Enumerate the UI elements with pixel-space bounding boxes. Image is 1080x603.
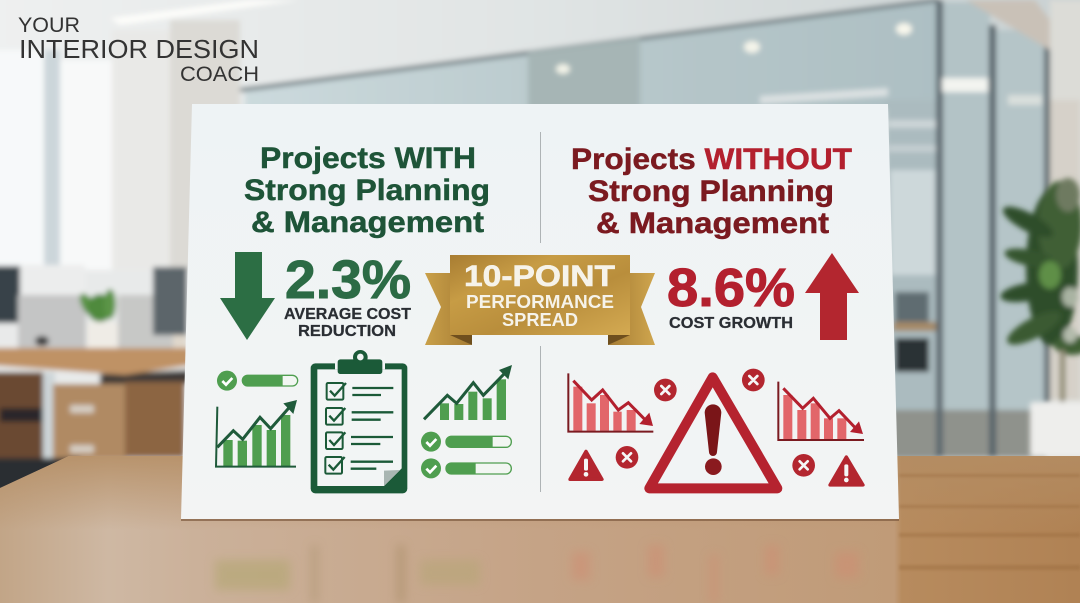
icon: x marks	[616, 369, 815, 477]
gold ribbon: 10-point performance spread	[425, 255, 655, 345]
wooden table	[0, 456, 1080, 603]
stat: 8.6% cost growth: 8.6%	[667, 258, 795, 318]
logo	[18, 14, 259, 86]
plant on the right	[999, 178, 1080, 457]
heading: projects without strong planning: Projects WITHOUT	[571, 143, 852, 176]
icon: green down arrow	[220, 252, 275, 340]
heading: projects with strong planning: Projects WITH	[260, 142, 476, 175]
icon: clipboard checklist	[311, 350, 407, 493]
green icon group	[216, 350, 512, 493]
chart: rising bars right	[424, 365, 512, 420]
icon: checks with progress bars	[421, 432, 511, 478]
icon: small warning triangles	[570, 451, 863, 485]
heading: projects without strong planning	[571, 143, 852, 240]
chart: falling bars right	[778, 382, 864, 440]
heading: projects with strong planning	[244, 142, 490, 239]
icon: large warning triangle	[649, 377, 777, 488]
heading: projects with strong planning: Strong Planning	[244, 174, 490, 207]
stat: 2.3% average cost reduction	[284, 250, 412, 340]
heading: projects without strong planning: Strong Planning	[588, 175, 834, 208]
gold ribbon: 10-point performance spread: PERFORMANCE	[466, 292, 614, 312]
gold ribbon: 10-point performance spread: SPREAD	[502, 310, 578, 330]
heading: projects with strong planning: & Management	[251, 206, 484, 239]
icon: check with progress bar	[217, 371, 298, 391]
red icon group	[568, 369, 864, 488]
stat: 2.3% average cost reduction: REDUCTION	[298, 323, 396, 340]
heading: projects without strong planning: & Management	[596, 207, 829, 240]
gold ribbon: 10-point performance spread: 10-POINT	[464, 260, 615, 293]
chart: falling bars left	[568, 373, 653, 432]
logo: YOUR	[18, 14, 80, 37]
logo: COACH	[180, 63, 259, 86]
sign panel	[181, 104, 899, 519]
stat: 8.6% cost growth: COST GROWTH	[669, 315, 793, 332]
icon: red up arrow	[805, 253, 859, 340]
chart: rising bars left	[216, 400, 297, 467]
stat: 2.3% average cost reduction: 2.3%	[285, 250, 411, 310]
logo: INTERIOR DESIGN	[19, 36, 259, 64]
stat: 2.3% average cost reduction: AVERAGE COST	[284, 306, 412, 323]
